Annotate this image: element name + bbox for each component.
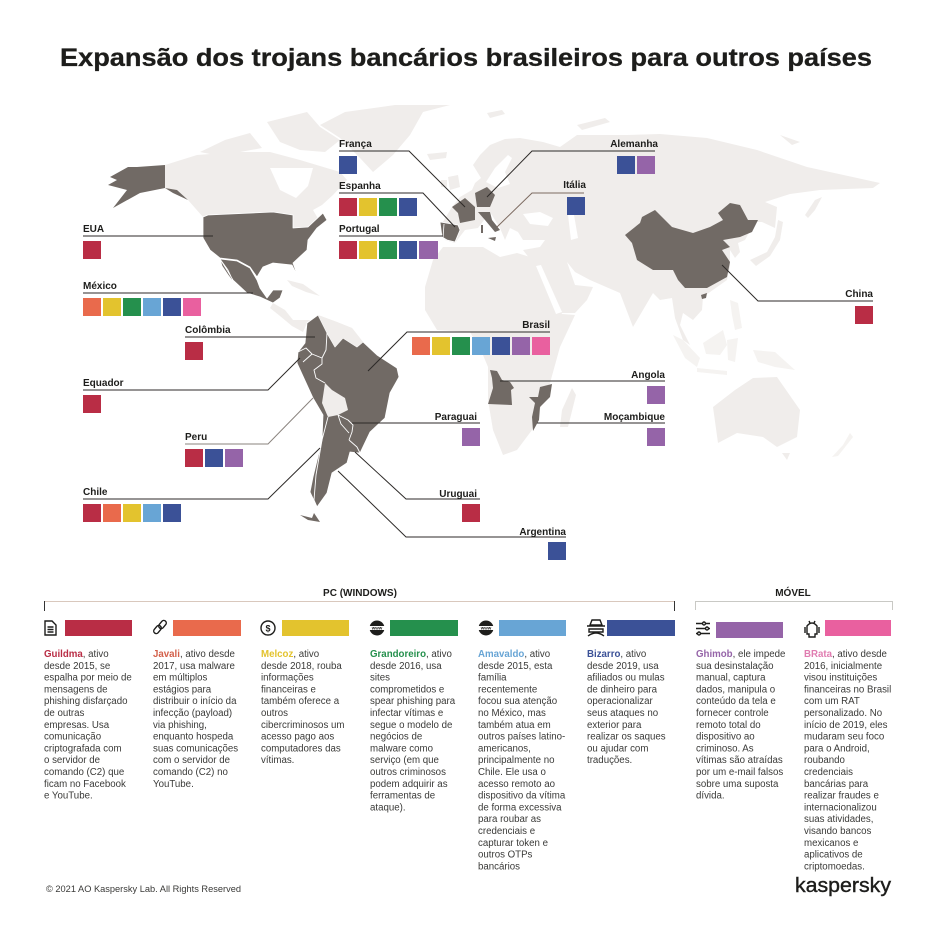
text: Javali: em múltiplos	[153, 673, 208, 684]
country: Germany	[475, 187, 495, 207]
map: south-east Asia islands, fainter	[673, 300, 853, 457]
text: BRata: BRata, ativo desde	[804, 649, 887, 660]
leader lines	[83, 151, 873, 537]
bracket: PC	[44, 601, 675, 611]
text: Bizarro: operacionalizar	[587, 696, 653, 707]
label: Portugal: Portugal	[339, 224, 380, 235]
label: Angola: Angola	[631, 370, 665, 381]
label: EUA	[83, 224, 104, 259]
label: Itália	[563, 180, 586, 215]
label: França	[339, 139, 372, 174]
text: Grandoreiro: podem adquirir as	[370, 779, 448, 790]
text: Guildma: e YouTube.	[44, 791, 93, 802]
country: Italy	[478, 212, 500, 232]
text: Amavaldo: para roubar as	[478, 814, 541, 825]
label: Uruguai: Uruguai	[439, 489, 477, 500]
country: Spain	[440, 222, 460, 242]
label: Itália: Itália	[563, 180, 586, 191]
text: Grandoreiro: spear phishing para	[370, 696, 456, 707]
label: Equador: Equador	[83, 378, 124, 389]
text: Bizarro: exterior para	[587, 720, 642, 731]
text: Melcoz: também oferece a	[261, 696, 340, 707]
text: Amavaldo: capturar token e	[478, 838, 548, 849]
text: Amavaldo: principalmente no	[478, 755, 554, 766]
text: BRata: 2016, inicialmente	[804, 661, 882, 672]
text: Amavaldo: família	[478, 673, 507, 684]
text: BRata: início de 2019, eles	[804, 720, 888, 731]
text: Guildma: espalha por meio de	[44, 673, 132, 684]
country: Portugal border	[443, 224, 444, 238]
text: Melcoz: desde 2018, rouba	[261, 661, 342, 672]
country: Hainan	[701, 293, 707, 299]
text: Ghimob: fornecer controle	[696, 708, 769, 719]
text: Javali: com o servidor de	[153, 755, 230, 766]
label: Brasil: Brasil	[522, 320, 550, 331]
text: BRata: internacionalizou	[804, 802, 877, 813]
icon: document	[45, 621, 56, 635]
legend: Ghimob	[696, 622, 785, 802]
text: Bizarro: traduções.	[587, 755, 632, 766]
text: Ghimob: vítimas são atraídas	[696, 755, 783, 766]
text: Grandoreiro: segue o modelo de	[370, 720, 452, 731]
label: Chile	[83, 487, 181, 522]
text: Javali: comando (C2) no	[153, 767, 228, 778]
text: Bizarro: afiliados ou mulas	[587, 673, 665, 684]
text: BRata: criptomoedas.	[804, 861, 865, 872]
text: Bizarro: ou ajudar com	[587, 743, 648, 754]
text: Grandoreiro: negócios de	[370, 732, 422, 743]
text: Guildma: empresas. Usa	[44, 720, 110, 731]
label: EUA: EUA	[83, 224, 104, 235]
text: Guildma: de outras	[44, 708, 85, 719]
icon: www globe	[478, 620, 494, 636]
text: Melcoz: cibercriminosos um	[261, 720, 344, 731]
icon: www globe: www	[480, 626, 492, 631]
legend: Grandoreiro	[369, 620, 458, 813]
copyright: © 2021 AO Kaspersky Lab. All Rights Reserved	[46, 884, 241, 894]
icon: www globe	[369, 620, 385, 636]
map: inland seas	[270, 155, 578, 314]
colour bar: BRata	[825, 620, 891, 636]
text: Ghimob: criminoso. As	[696, 743, 754, 754]
text: Javali: Javali, ativo desde	[153, 649, 235, 660]
country: Sicily	[488, 237, 496, 241]
text: BRata: roubando	[804, 755, 845, 766]
text: BRata: aplicativos de	[804, 850, 863, 861]
label: Brasil	[412, 320, 550, 355]
country: Venezuela and Guianas (not highlighted)	[318, 315, 363, 347]
text: Amavaldo: Chile. Ele usa o	[478, 767, 546, 778]
text: Melcoz: Melcoz, ativo	[261, 649, 319, 660]
heading: Móvel: MÓVEL	[775, 586, 811, 599]
country: France	[452, 198, 475, 223]
text: BRata: personalizado. No	[804, 708, 882, 719]
label: China: China	[845, 289, 873, 300]
text: Ghimob: por um e-mail falsos	[696, 767, 783, 778]
text: BRata: realizar fraudes e	[804, 791, 879, 802]
text: Javali: enquanto hospeda	[153, 732, 234, 743]
country: China	[625, 203, 758, 288]
legend: Amavaldo	[478, 620, 566, 872]
country: Tierra del Fuego	[300, 513, 320, 522]
text: Javali: infecção (payload)	[153, 708, 232, 719]
text: Amavaldo: recentemente	[478, 684, 537, 695]
text: Grandoreiro: sites	[370, 673, 390, 684]
text: Bizarro: seus ataques no	[587, 708, 658, 719]
text: Guildma: criptografada com	[44, 743, 122, 754]
text: Javali: estágios para	[153, 684, 212, 695]
text: Amavaldo: focou sua atenção	[478, 696, 557, 707]
map: other countries in light grey	[165, 105, 880, 460]
text: BRata: com um RAT	[804, 696, 860, 707]
text: Melcoz: computadores das	[261, 743, 341, 754]
text: Ghimob: sua desinstalação	[696, 661, 774, 672]
label: Paraguai	[435, 412, 480, 446]
logo: kaspersky: kaspersky	[795, 875, 891, 897]
label: Alemanha: Alemanha	[610, 139, 658, 150]
text: BRata: visou instituições	[804, 673, 877, 684]
heading: PC (Windows): PC (WINDOWS)	[323, 588, 397, 599]
label: França: França	[339, 139, 372, 150]
label: Equador	[83, 378, 124, 413]
label: Chile: Chile	[83, 487, 108, 498]
text: Melcoz: acesso pago aos	[261, 732, 334, 743]
text: Melcoz: informações	[261, 673, 314, 684]
text: BRata: para o Android,	[804, 743, 870, 754]
text: Amavaldo: desde 2015, esta	[478, 661, 553, 672]
text: Amavaldo: acesso remoto ao	[478, 779, 555, 790]
colour bar: Javali	[173, 620, 241, 636]
colour bar: Melcoz	[282, 620, 349, 636]
label: Uruguai	[439, 489, 480, 522]
text: Ghimob: sobre uma suposta	[696, 779, 779, 790]
text: BRata: visando bancos	[804, 826, 871, 837]
text: Grandoreiro: outros criminosos	[370, 767, 446, 778]
text: Amavaldo: também atua em	[478, 720, 551, 731]
colour bar: Grandoreiro	[390, 620, 458, 636]
title: Expansão dos trojans bancários brasileiros para outros países	[60, 44, 872, 72]
label: Angola	[631, 370, 665, 404]
text: Amavaldo: dispositivo da vítima	[478, 791, 566, 802]
text: Amavaldo: outros países latino-	[478, 732, 565, 743]
legend: Bizarro	[587, 620, 675, 766]
text: Amavaldo: credenciais e	[478, 826, 535, 837]
text: Guildma: desde 2015, se	[44, 661, 110, 672]
country: Bolivia (not highlighted)	[322, 383, 348, 417]
label: Alemanha	[610, 139, 658, 174]
text: Javali: via phishing,	[153, 720, 207, 731]
label: Moçambique	[604, 412, 665, 446]
text: Guildma: mensagens de	[44, 684, 108, 695]
borders: South America	[298, 333, 360, 507]
text: Melcoz: financeiras e	[261, 684, 316, 695]
text: Ghimob: dívida.	[696, 791, 725, 802]
label: Colômbia	[185, 325, 231, 360]
label: Peru: Peru	[185, 432, 207, 443]
country: Mexico	[220, 259, 283, 303]
country: Angola	[488, 370, 514, 405]
text: Grandoreiro: ataque).	[370, 802, 406, 813]
text: Melcoz: vítimas.	[261, 755, 294, 766]
label: Colômbia: Colômbia	[185, 325, 231, 336]
label: México: México	[83, 281, 117, 292]
map: highlighted countries in dark grey	[108, 165, 758, 522]
icon: chain link	[153, 619, 167, 635]
text: Ghimob: remoto total do	[696, 720, 761, 731]
text: Grandoreiro: Grandoreiro, ativo	[370, 649, 452, 660]
text: Grandoreiro: comprometidos e	[370, 684, 444, 695]
label: Peru	[185, 432, 243, 467]
legend: Javali	[153, 619, 241, 790]
text: Grandoreiro: ferramentas de	[370, 791, 435, 802]
text: Javali: YouTube.	[153, 779, 194, 790]
label: Portugal	[339, 224, 438, 259]
country: Alaska	[108, 165, 188, 208]
bracket: Móvel	[696, 602, 892, 610]
text: BRata: mexicanos e	[804, 838, 858, 849]
country: Sardinia	[481, 225, 483, 233]
text: Ghimob: dados, manipula o	[696, 684, 775, 695]
label: Moçambique: Moçambique	[604, 412, 665, 423]
text: Javali: suas comunicações	[153, 743, 238, 754]
text: Guildma: phishing disfarçado	[44, 696, 127, 707]
text: Amavaldo: bancários	[478, 861, 520, 872]
text: BRata: mudaram seu foco	[804, 732, 884, 743]
label: Espanha	[339, 181, 417, 216]
text: Grandoreiro: malware como	[370, 743, 433, 754]
text: BRata: bancárias para	[804, 779, 869, 790]
text: Javali: 2017, usa malware	[153, 661, 235, 672]
text: Guildma: o servidor de	[44, 755, 100, 766]
text: Bizarro: realizar os saques	[587, 732, 666, 743]
label: China	[845, 289, 873, 324]
legend: Melcoz	[261, 620, 349, 766]
text: Bizarro: de dinheiro para	[587, 684, 658, 695]
text: Amavaldo: outros OTPs	[478, 850, 533, 861]
label: México	[83, 281, 201, 316]
text: Amavaldo: americanos,	[478, 743, 531, 754]
country: South America group	[297, 315, 399, 507]
icon: coin	[261, 621, 275, 635]
text: Ghimob: dispositivo ao	[696, 732, 755, 743]
text: Ghimob: Ghimob, ele impede	[696, 649, 785, 660]
text: BRata: suas atividades,	[804, 814, 873, 825]
text: Bizarro: desde 2019, usa	[587, 661, 659, 672]
world map	[108, 105, 880, 522]
label: Argentina	[519, 527, 566, 560]
text: Guildma: comando (C2) que	[44, 767, 124, 778]
text: Melcoz: outros	[261, 708, 288, 719]
text: Javali: distribuir o início da	[153, 696, 237, 707]
text: Ghimob: conteúdo da tela e	[696, 696, 776, 707]
text: Grandoreiro: serviço (em que	[370, 755, 439, 766]
colour bar: Bizarro	[607, 620, 675, 636]
country: USA	[203, 212, 327, 277]
text: Guildma: Guildma, ativo	[44, 649, 109, 660]
legend: BRata	[804, 620, 891, 872]
colour bar: Amavaldo	[499, 620, 566, 636]
label: Espanha: Espanha	[339, 181, 381, 192]
country: Mozambique	[529, 384, 552, 431]
text: BRata: financeiras no Brasil	[804, 684, 891, 695]
icon: coin: $	[265, 624, 271, 634]
icon: android	[805, 621, 819, 637]
colour bar: Guildma	[65, 620, 132, 636]
text: Amavaldo: Amavaldo, ativo	[478, 649, 550, 660]
text: BRata: credenciais	[804, 767, 853, 778]
text: Amavaldo: no México, mas	[478, 708, 546, 719]
text: Grandoreiro: infectar vítimas e	[370, 708, 443, 719]
text: Grandoreiro: desde 2016, usa	[370, 661, 442, 672]
colour bar: Ghimob	[716, 622, 783, 638]
text: Guildma: comunicação	[44, 732, 101, 743]
icon: sliders	[696, 622, 710, 635]
legend: Guildma	[44, 620, 132, 802]
label: Paraguai: Paraguai	[435, 412, 477, 423]
icon: www globe: www	[371, 626, 383, 631]
text: Guildma: ficam no Facebook	[44, 779, 126, 790]
icon: spy	[587, 620, 605, 636]
text: Bizarro: Bizarro, ativo	[587, 649, 646, 660]
text: Ghimob: manual, captura	[696, 673, 766, 684]
text: Amavaldo: de forma excessiva	[478, 802, 562, 813]
label: Argentina: Argentina	[519, 527, 566, 538]
